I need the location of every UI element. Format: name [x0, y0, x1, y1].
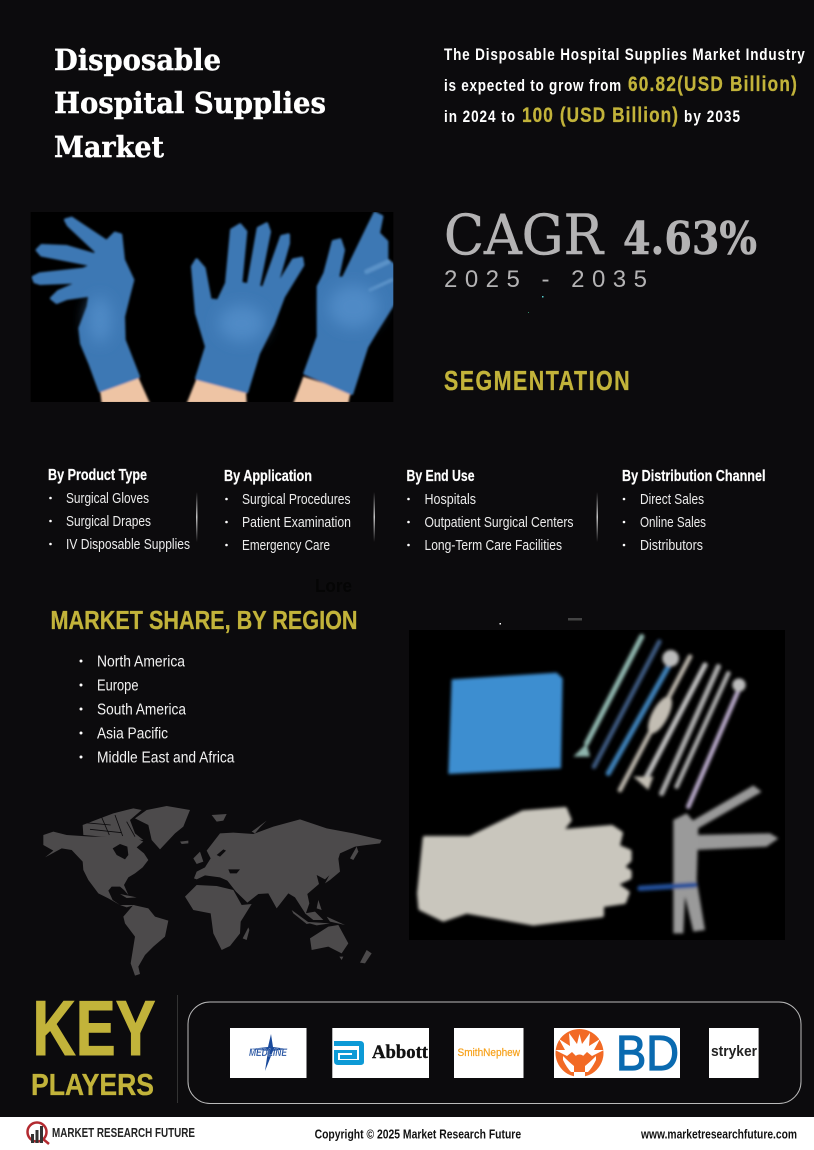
- copyright: Copyright © 2025 Market Research Future: [315, 1126, 521, 1142]
- segment: by application: Emergency Care: [242, 537, 330, 554]
- segment: by application: Surgical Procedures: [242, 491, 350, 508]
- segment: by end use: Long-Term Care Facilities: [424, 537, 562, 554]
- region list: [80, 654, 235, 766]
- title: Disposable: [54, 43, 221, 77]
- region list: Asia Pacific: [97, 726, 168, 742]
- segment: by application: Patient Examination: [242, 514, 351, 531]
- segment: by product type: Surgical Gloves: [66, 490, 149, 507]
- market growth summary text: 100 (USD Billion): [522, 103, 678, 128]
- logo icon: market research future: [28, 1122, 49, 1144]
- segment: by product type: Surgical Drapes: [66, 513, 151, 530]
- image: blue surgical gloves: [31, 212, 393, 403]
- CAGR value: 2025 - 2035: [444, 266, 647, 293]
- logo: Smith and Nephew: [454, 1028, 524, 1078]
- segment: by end use: Outpatient Surgical Centers: [424, 514, 574, 531]
- segment: by product type: By Product Type: [48, 467, 147, 484]
- footer bar: [0, 1117, 814, 1150]
- segment: by distribution channel: Direct Sales: [640, 491, 704, 508]
- logo: Stryker: [709, 1028, 759, 1078]
- segment: by distribution channel: Distributors: [640, 537, 703, 554]
- segment: by application: [224, 468, 351, 554]
- region list: South America: [97, 702, 186, 718]
- heading: segmentation: SEGMENTATION: [444, 367, 630, 397]
- faint hidden text: Lore: [315, 576, 352, 596]
- key players heading: [31, 984, 156, 1102]
- market growth summary text: is expected to grow from: [444, 77, 621, 95]
- logo: Smith and Nephew: SmithNephew: [458, 1047, 520, 1059]
- CAGR value: CAGR: [444, 203, 605, 267]
- segment: by product type: [48, 467, 190, 553]
- logo: Stryker: stryker: [711, 1043, 757, 1060]
- region list: North America: [97, 654, 185, 670]
- segment: by product type: IV Disposable Supplies: [66, 536, 190, 553]
- segment: by distribution channel: Online Sales: [640, 514, 706, 531]
- market growth summary text: The Disposable Hospital Supplies Market Industry: [444, 46, 805, 64]
- key players logo panel: [188, 1002, 801, 1104]
- segment: by distribution channel: [622, 468, 766, 554]
- image: medical examination kit: [409, 630, 785, 940]
- key players heading: PLAYERS: [31, 1067, 154, 1102]
- segment: by end use: Hospitals: [424, 491, 476, 508]
- logo: Medline: MEDLINE: [249, 1047, 288, 1059]
- logo: Abbott: [332, 1028, 429, 1078]
- segment: by distribution channel: By Distribution Channel: [622, 468, 766, 485]
- CAGR value: [444, 203, 757, 293]
- footer brand name: MARKET RESEARCH FUTURE: [52, 1125, 195, 1140]
- region list: Europe: [97, 678, 138, 694]
- logo: Medline: [230, 1028, 306, 1078]
- title: Market: [54, 130, 165, 164]
- segment: by end use: By End Use: [406, 468, 475, 485]
- market growth summary text: 60.82(USD Billion): [628, 72, 797, 97]
- title: Hospital Supplies: [54, 86, 326, 120]
- logo: Abbott: Abbott: [372, 1042, 429, 1063]
- market growth summary text: in 2024 to: [444, 108, 515, 126]
- title: [54, 43, 326, 164]
- key players heading: KEY: [32, 984, 156, 1072]
- world map: [43, 806, 382, 976]
- heading: market share by region: MARKET SHARE, BY REGION: [50, 605, 358, 635]
- segment: by end use: [406, 468, 574, 554]
- logo: BD: [554, 1027, 680, 1081]
- segment: by application: By Application: [224, 468, 312, 485]
- logo: BD: BD: [616, 1027, 679, 1081]
- CAGR value: 4.63%: [623, 212, 757, 265]
- region list: Middle East and Africa: [97, 750, 235, 766]
- market growth summary text: by 2035: [684, 108, 740, 126]
- market growth summary text: [444, 46, 805, 128]
